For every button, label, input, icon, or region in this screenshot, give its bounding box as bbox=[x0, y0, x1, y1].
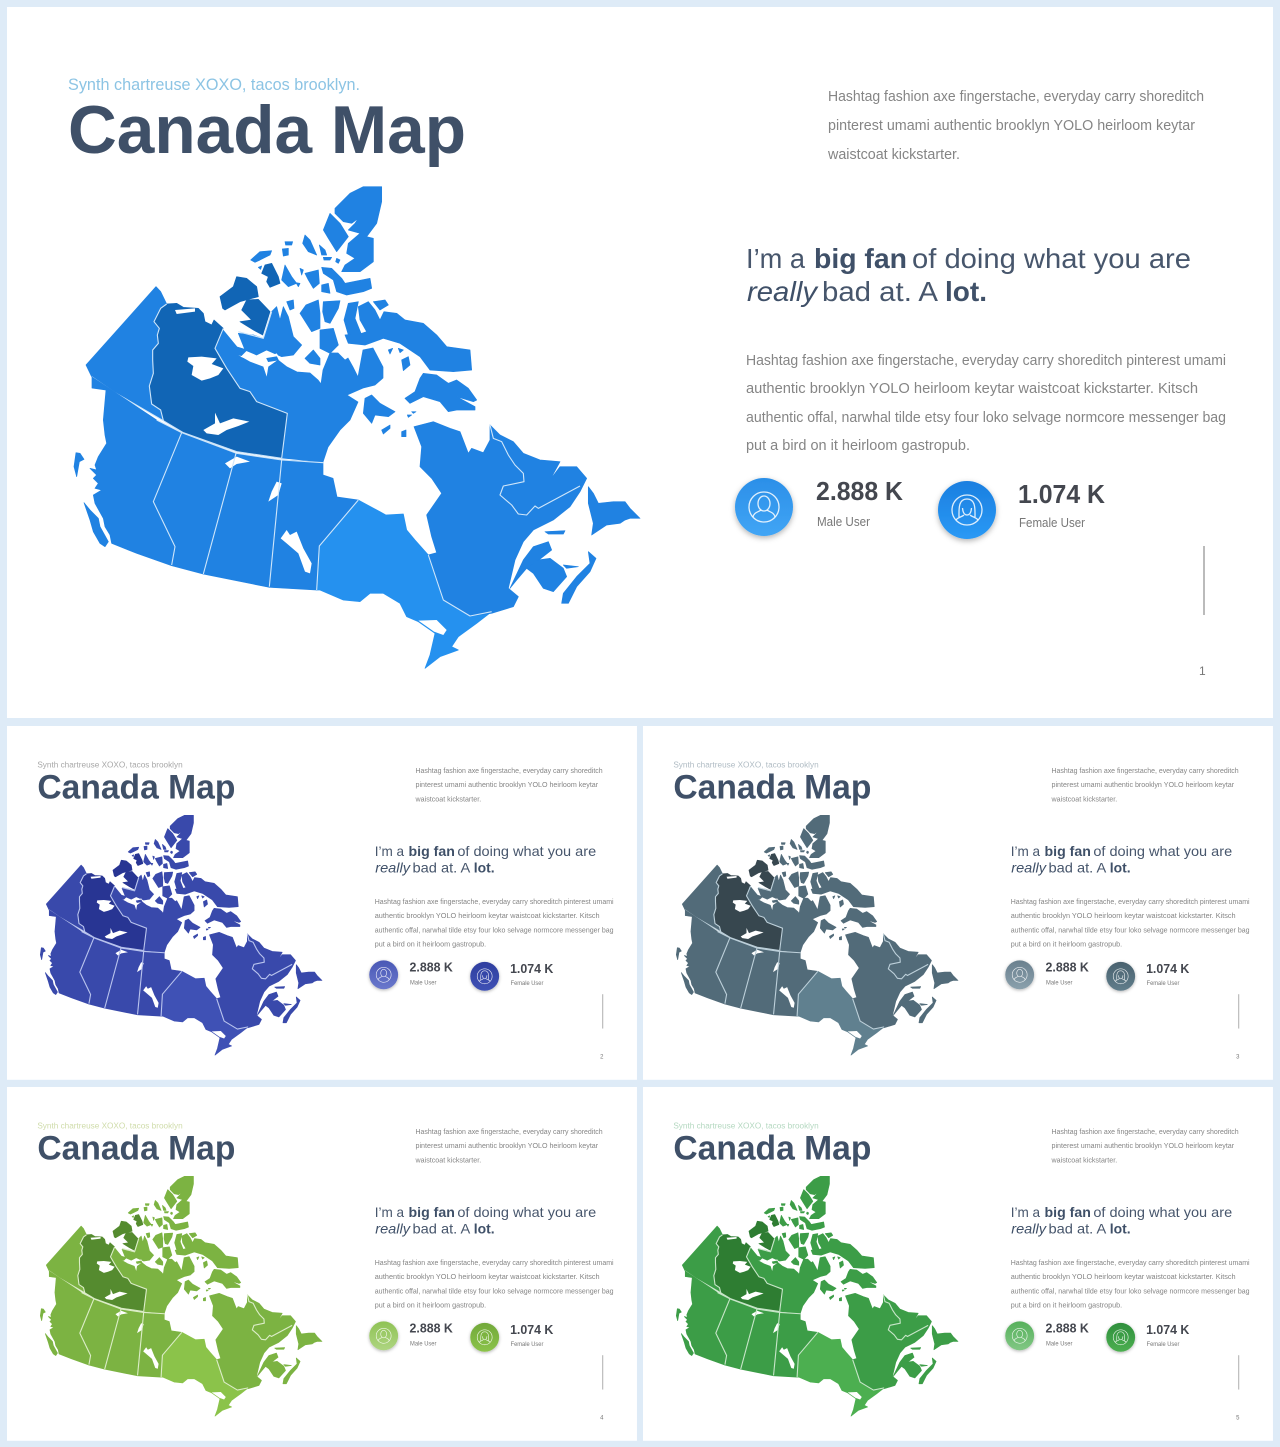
page number: 2 bbox=[600, 1054, 604, 1060]
quote heading: of doing what you are bbox=[1093, 843, 1232, 859]
body paragraph: authentic offal, narwhal tilde etsy four loko selvage normcore messenger bag bbox=[746, 410, 1226, 426]
icon: female user bbox=[470, 1323, 499, 1352]
icon: male user bbox=[1005, 960, 1034, 989]
quote heading: really bbox=[747, 276, 819, 307]
quote heading: lot. bbox=[1110, 1220, 1131, 1236]
icon: male user bbox=[1005, 1321, 1034, 1350]
map of Canada bbox=[40, 1176, 322, 1416]
panel: green slide bbox=[643, 1087, 1273, 1441]
stat: female users bbox=[510, 1322, 554, 1348]
stat: female users: 1.074 K bbox=[1146, 961, 1190, 976]
stat: male users bbox=[816, 476, 903, 529]
subtitle: Synth chartreuse XOXO, tacos brooklyn. bbox=[68, 75, 360, 94]
body paragraph bbox=[1011, 897, 1250, 948]
body paragraph: authentic offal, narwhal tilde etsy four loko selvage normcore messenger bag bbox=[1011, 926, 1250, 935]
intro paragraph: pinterest umami authentic brooklyn YOLO heirloom keytar bbox=[1052, 780, 1235, 789]
page number: 1 bbox=[1199, 664, 1206, 678]
quote heading: bad at. A bbox=[413, 859, 471, 875]
title: Canada Map bbox=[673, 1130, 871, 1168]
stat: male users: 2.888 K bbox=[410, 1320, 453, 1335]
quote heading bbox=[375, 843, 596, 875]
stat: male users: Male User bbox=[817, 515, 870, 529]
quote heading: I’m a bbox=[1011, 843, 1040, 859]
quote heading: bad at. A bbox=[822, 276, 938, 307]
quote heading: really bbox=[375, 1220, 411, 1236]
body paragraph: Hashtag fashion axe fingerstache, everyday carry shoreditch pinterest umami bbox=[375, 897, 614, 906]
intro paragraph: waistcoat kickstarter. bbox=[415, 1156, 481, 1165]
stat: male users: Male User bbox=[410, 1340, 436, 1347]
intro paragraph: pinterest umami authentic brooklyn YOLO heirloom keytar bbox=[1052, 1141, 1235, 1150]
quote heading: lot. bbox=[1110, 859, 1131, 875]
quote heading: really bbox=[375, 859, 411, 875]
icon: female user bbox=[938, 481, 996, 539]
intro paragraph: pinterest umami authentic brooklyn YOLO heirloom keytar bbox=[828, 118, 1195, 134]
quote heading: I’m a bbox=[746, 243, 805, 274]
stat: male users: 2.888 K bbox=[816, 476, 903, 506]
quote heading: I’m a bbox=[375, 843, 404, 859]
subtitle: Synth chartreuse XOXO, tacos brooklyn bbox=[37, 759, 183, 769]
stat: male users: 2.888 K bbox=[1046, 959, 1089, 974]
quote heading: big fan bbox=[1045, 1204, 1091, 1220]
quote heading: I’m a bbox=[375, 1204, 404, 1220]
quote heading: really bbox=[1011, 859, 1047, 875]
body paragraph: put a bird on it heirloom gastropub. bbox=[1011, 1300, 1122, 1309]
panel: indigo slide bbox=[7, 726, 637, 1080]
title: Canada Map bbox=[68, 92, 466, 168]
stat: male users: 2.888 K bbox=[410, 959, 453, 974]
page number: 5 bbox=[1236, 1415, 1240, 1421]
title: Canada Map bbox=[37, 1130, 235, 1168]
quote heading: bad at. A bbox=[413, 1220, 471, 1236]
body paragraph: Hashtag fashion axe fingerstache, everyday carry shoreditch pinterest umami bbox=[746, 353, 1226, 369]
subtitle: Synth chartreuse XOXO, tacos brooklyn bbox=[673, 1120, 819, 1130]
intro paragraph: waistcoat kickstarter. bbox=[415, 795, 481, 804]
quote heading: big fan bbox=[409, 843, 455, 859]
body paragraph: put a bird on it heirloom gastropub. bbox=[375, 1300, 486, 1309]
body paragraph: authentic brooklyn YOLO heirloom keytar waistcoat kickstarter. Kitsch bbox=[746, 381, 1198, 397]
body paragraph: put a bird on it heirloom gastropub. bbox=[1011, 939, 1122, 948]
quote heading: lot. bbox=[474, 859, 495, 875]
quote heading: of doing what you are bbox=[457, 843, 596, 859]
body paragraph: Hashtag fashion axe fingerstache, everyday carry shoreditch pinterest umami bbox=[375, 1258, 614, 1267]
quote heading: bad at. A bbox=[1049, 859, 1107, 875]
quote heading bbox=[746, 243, 1191, 307]
panel: main blue slide bbox=[7, 7, 1273, 718]
stat: male users: 2.888 K bbox=[1046, 1320, 1089, 1335]
body paragraph: authentic brooklyn YOLO heirloom keytar waistcoat kickstarter. Kitsch bbox=[1011, 1272, 1236, 1281]
intro paragraph bbox=[415, 766, 603, 804]
intro paragraph: pinterest umami authentic brooklyn YOLO heirloom keytar bbox=[416, 1141, 599, 1150]
stat: male users bbox=[410, 959, 453, 986]
intro paragraph: waistcoat kickstarter. bbox=[827, 147, 960, 163]
quote heading: big fan bbox=[814, 243, 907, 274]
stat: male users: Male User bbox=[410, 979, 436, 986]
intro paragraph: waistcoat kickstarter. bbox=[1051, 1156, 1117, 1165]
intro paragraph: Hashtag fashion axe fingerstache, everyday carry shoreditch bbox=[1052, 766, 1239, 775]
icon: female user bbox=[1106, 1323, 1135, 1352]
body paragraph: Hashtag fashion axe fingerstache, everyday carry shoreditch pinterest umami bbox=[1011, 1258, 1250, 1267]
intro paragraph: pinterest umami authentic brooklyn YOLO heirloom keytar bbox=[416, 780, 599, 789]
quote heading: I’m a bbox=[1011, 1204, 1040, 1220]
icon: male user bbox=[369, 960, 398, 989]
intro paragraph: Hashtag fashion axe fingerstache, everyday carry shoreditch bbox=[416, 766, 603, 775]
intro paragraph bbox=[415, 1127, 603, 1165]
stat: female users: 1.074 K bbox=[1146, 1322, 1190, 1337]
stat: female users: Female User bbox=[511, 1341, 543, 1348]
icon: female user bbox=[1106, 962, 1135, 991]
stat: male users bbox=[1046, 959, 1089, 986]
body paragraph bbox=[1011, 1258, 1250, 1309]
stat: female users: Female User bbox=[511, 980, 543, 987]
stat: female users bbox=[1146, 961, 1190, 987]
quote heading: lot. bbox=[945, 276, 987, 307]
intro paragraph bbox=[1051, 1127, 1239, 1165]
intro paragraph: Hashtag fashion axe fingerstache, everyday carry shoreditch bbox=[1052, 1127, 1239, 1136]
body paragraph bbox=[375, 1258, 614, 1309]
body paragraph: authentic brooklyn YOLO heirloom keytar waistcoat kickstarter. Kitsch bbox=[375, 1272, 600, 1281]
body paragraph: authentic brooklyn YOLO heirloom keytar waistcoat kickstarter. Kitsch bbox=[1011, 911, 1236, 920]
quote heading bbox=[375, 1204, 596, 1236]
body paragraph bbox=[375, 897, 614, 948]
stat: female users bbox=[510, 961, 554, 987]
stat: male users bbox=[1046, 1320, 1089, 1347]
quote heading: big fan bbox=[409, 1204, 455, 1220]
intro paragraph: Hashtag fashion axe fingerstache, everyday carry shoreditch bbox=[828, 89, 1204, 105]
body paragraph: authentic offal, narwhal tilde etsy four loko selvage normcore messenger bag bbox=[375, 926, 614, 935]
map of Canada bbox=[676, 815, 958, 1055]
quote heading: bad at. A bbox=[1049, 1220, 1107, 1236]
intro paragraph bbox=[1051, 766, 1239, 804]
subtitle: Synth chartreuse XOXO, tacos brooklyn bbox=[37, 1120, 183, 1130]
quote heading bbox=[1011, 843, 1232, 875]
quote heading: lot. bbox=[474, 1220, 495, 1236]
stat: female users: 1.074 K bbox=[510, 1322, 554, 1337]
map of Canada bbox=[74, 187, 640, 668]
panel: lime slide bbox=[7, 1087, 637, 1441]
intro paragraph: waistcoat kickstarter. bbox=[1051, 795, 1117, 804]
body paragraph: Hashtag fashion axe fingerstache, everyday carry shoreditch pinterest umami bbox=[1011, 897, 1250, 906]
map of Canada bbox=[676, 1176, 958, 1416]
icon: female user bbox=[470, 962, 499, 991]
stat: male users bbox=[410, 1320, 453, 1347]
body paragraph: authentic offal, narwhal tilde etsy four loko selvage normcore messenger bag bbox=[1011, 1287, 1250, 1296]
body paragraph bbox=[746, 353, 1226, 454]
intro paragraph bbox=[827, 89, 1204, 163]
icon: male user bbox=[735, 478, 793, 536]
body paragraph: authentic brooklyn YOLO heirloom keytar waistcoat kickstarter. Kitsch bbox=[375, 911, 600, 920]
icon: male user bbox=[369, 1321, 398, 1350]
stat: female users: Female User bbox=[1019, 516, 1085, 530]
subtitle: Synth chartreuse XOXO, tacos brooklyn bbox=[673, 759, 819, 769]
page number: 3 bbox=[1236, 1054, 1240, 1060]
stat: male users: Male User bbox=[1046, 979, 1072, 986]
stat: male users: Male User bbox=[1046, 1340, 1072, 1347]
page number: 4 bbox=[600, 1415, 604, 1421]
quote heading bbox=[1011, 1204, 1232, 1236]
quote heading: of doing what you are bbox=[1093, 1204, 1232, 1220]
quote heading: really bbox=[1011, 1220, 1047, 1236]
stat: female users bbox=[1146, 1322, 1190, 1348]
title: Canada Map bbox=[673, 769, 871, 807]
panel: slate slide bbox=[643, 726, 1273, 1080]
quote heading: big fan bbox=[1045, 843, 1091, 859]
map of Canada bbox=[40, 815, 322, 1055]
intro paragraph: Hashtag fashion axe fingerstache, everyday carry shoreditch bbox=[416, 1127, 603, 1136]
quote heading: of doing what you are bbox=[457, 1204, 596, 1220]
quote heading: of doing what you are bbox=[912, 243, 1191, 274]
stat: female users: 1.074 K bbox=[510, 961, 554, 976]
stat: female users: Female User bbox=[1147, 980, 1179, 987]
title: Canada Map bbox=[37, 769, 235, 807]
stat: female users: Female User bbox=[1147, 1341, 1179, 1348]
stat: female users bbox=[1018, 479, 1105, 530]
body paragraph: put a bird on it heirloom gastropub. bbox=[746, 438, 970, 454]
body paragraph: authentic offal, narwhal tilde etsy four loko selvage normcore messenger bag bbox=[375, 1287, 614, 1296]
body paragraph: put a bird on it heirloom gastropub. bbox=[375, 939, 486, 948]
stat: female users: 1.074 K bbox=[1018, 479, 1105, 509]
